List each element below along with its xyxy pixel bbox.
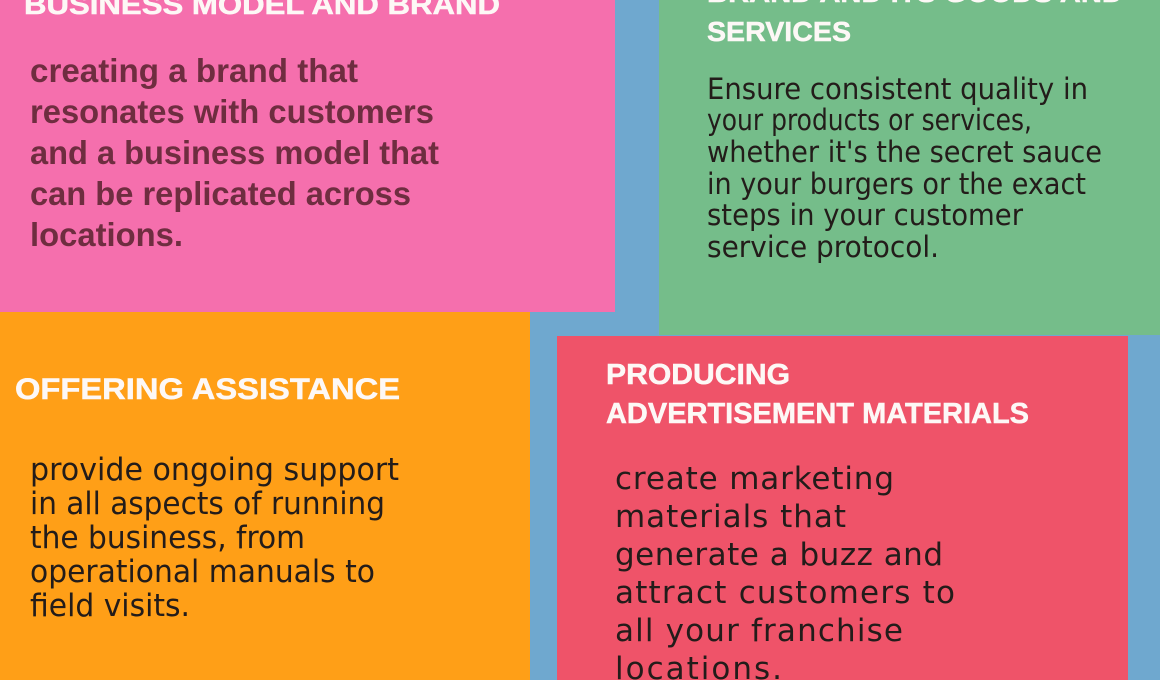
- text block: ongoing support description: in all aspects of running: [30, 486, 385, 522]
- text block: business model description: locations.: [30, 216, 183, 253]
- heading: producing advertisement materials: [606, 359, 1029, 430]
- text block: marketing materials description: generate a buzz and: [615, 537, 943, 573]
- text block: consistent quality description: [707, 72, 1102, 264]
- text block: consistent quality description: Ensure consistent quality in: [707, 72, 1088, 106]
- text block: business model description: can be replicated across: [30, 175, 411, 212]
- panel: offering assistance: [0, 312, 530, 680]
- text block: marketing materials description: attract customers to: [615, 575, 955, 611]
- panel: brand and its goods and services: [659, 0, 1160, 335]
- text block: business model description: [30, 52, 439, 253]
- text block: consistent quality description: in your burgers or the exact: [707, 167, 1086, 201]
- text block: consistent quality description: your products or services,: [707, 103, 1032, 137]
- text block: business model description: and a business model that: [30, 134, 439, 171]
- heading: offering assistance: OFFERING ASSISTANCE: [15, 373, 400, 406]
- heading: producing advertisement materials: ADVERTISEMENT MATERIALS: [606, 398, 1029, 430]
- text block: marketing materials description: materials that: [615, 499, 846, 535]
- panel: business model and brand: [0, 0, 615, 312]
- text block: ongoing support description: operational manuals to: [30, 554, 375, 590]
- text block: ongoing support description: field visits.: [30, 588, 190, 624]
- text block: business model description: creating a brand that: [30, 52, 358, 89]
- text block: consistent quality description: whether it's the secret sauce: [707, 135, 1102, 169]
- heading: producing advertisement materials: PRODUCING: [606, 359, 790, 391]
- text block: marketing materials description: [615, 461, 955, 680]
- heading: brand and its goods and services: SERVICES: [707, 16, 851, 47]
- heading: brand and its goods and services: [707, 0, 1123, 47]
- text block: ongoing support description: provide ongoing support: [30, 452, 399, 488]
- text block: marketing materials description: all your franchise: [615, 613, 903, 649]
- panel: producing advertisement materials: [557, 336, 1128, 680]
- text block: consistent quality description: service protocol.: [707, 230, 939, 264]
- text block: ongoing support description: the business, from: [30, 520, 305, 556]
- text block: ongoing support description: [30, 452, 399, 624]
- text block: business model description: resonates with customers: [30, 93, 434, 130]
- text block: marketing materials description: create marketing: [615, 461, 894, 497]
- text block: consistent quality description: steps in your customer: [707, 198, 1023, 232]
